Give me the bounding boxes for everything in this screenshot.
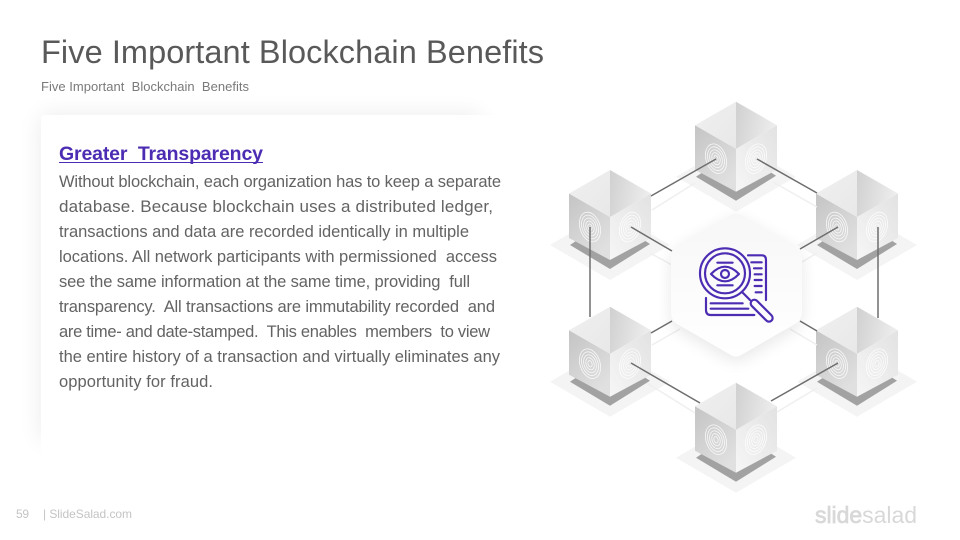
footer: site name: | SlideSalad.com <box>43 507 132 521</box>
panel: text card <box>41 115 521 465</box>
heading: greater transparency: Greater Transparency <box>59 143 263 165</box>
subtitle: Five Important Blockchain Benefits <box>41 79 250 94</box>
dark connector lines <box>590 159 878 403</box>
central hexagon <box>671 214 802 362</box>
cube: upper right <box>797 170 917 280</box>
icon: magnifier eye over document <box>700 248 774 323</box>
logo: slidesalad: slidesalad <box>815 502 917 528</box>
diagram: blockchain hexagon network <box>550 102 917 493</box>
body text: opportunity for fraud. <box>59 373 213 391</box>
pale connector lines <box>647 182 817 413</box>
cube: bottom <box>676 383 796 493</box>
body text: Without blockchain, each organization has to keep a separate <box>59 173 501 191</box>
cube: top <box>676 102 796 212</box>
cube: lower left <box>550 307 670 417</box>
title: Five Important Blockchain Benefits <box>41 34 544 70</box>
cube: lower right <box>797 307 917 417</box>
body text: transparency. All transactions are immutability recorded and <box>59 298 495 316</box>
cube: upper left <box>550 170 670 280</box>
footer: page number: 59 <box>16 507 29 521</box>
body text: transactions and data are recorded identically in multiple <box>59 223 469 241</box>
body text: locations. All network participants with permissioned access <box>59 248 497 266</box>
body text <box>59 173 501 391</box>
body text: the entire history of a transaction and virtually eliminates any <box>59 348 501 366</box>
body text: are time- and date-stamped. This enables members to view <box>59 323 490 341</box>
body text: see the same information at the same time, providing full <box>59 273 470 291</box>
body text: database. Because blockchain uses a distributed ledger, <box>59 197 493 216</box>
